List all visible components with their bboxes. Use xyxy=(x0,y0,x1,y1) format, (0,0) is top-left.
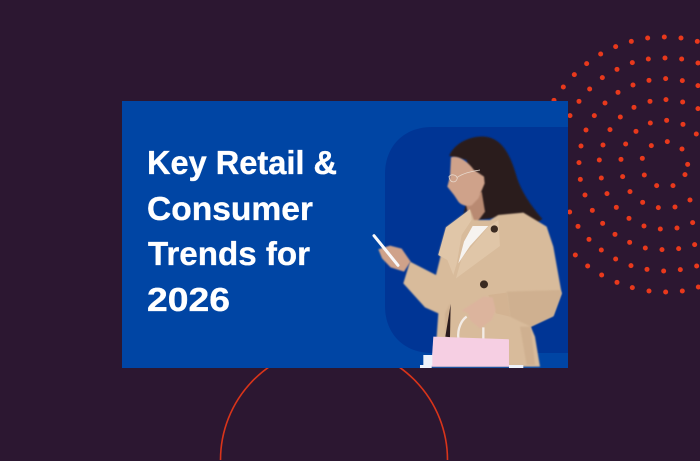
raised hand xyxy=(378,246,411,272)
blue card xyxy=(122,101,568,368)
red dot pattern lower xyxy=(567,160,700,294)
title: 2026 xyxy=(147,281,230,318)
coat shading xyxy=(445,290,562,365)
title: Trends for xyxy=(148,235,310,272)
front hand xyxy=(462,297,496,328)
lapel xyxy=(456,220,500,278)
shopping bag xyxy=(431,337,509,367)
neck xyxy=(465,192,485,225)
glasses xyxy=(449,170,480,182)
white shirt xyxy=(458,226,488,263)
coat buttons xyxy=(480,225,498,288)
bag handles xyxy=(458,317,483,340)
white box under bag xyxy=(420,355,523,368)
hair back xyxy=(449,137,542,230)
red dot pattern upper xyxy=(551,34,700,162)
darker rounded panel xyxy=(385,127,568,353)
dark inner coat gap xyxy=(445,304,451,337)
title: Consumer xyxy=(147,190,313,227)
red circle outline xyxy=(220,346,448,460)
cuff xyxy=(488,293,510,317)
title: Key Retail & xyxy=(147,144,337,181)
face xyxy=(447,157,485,206)
title xyxy=(147,144,337,318)
phone xyxy=(374,236,398,265)
woman with phone and shopping bag xyxy=(374,137,562,368)
trench coat xyxy=(403,209,562,367)
